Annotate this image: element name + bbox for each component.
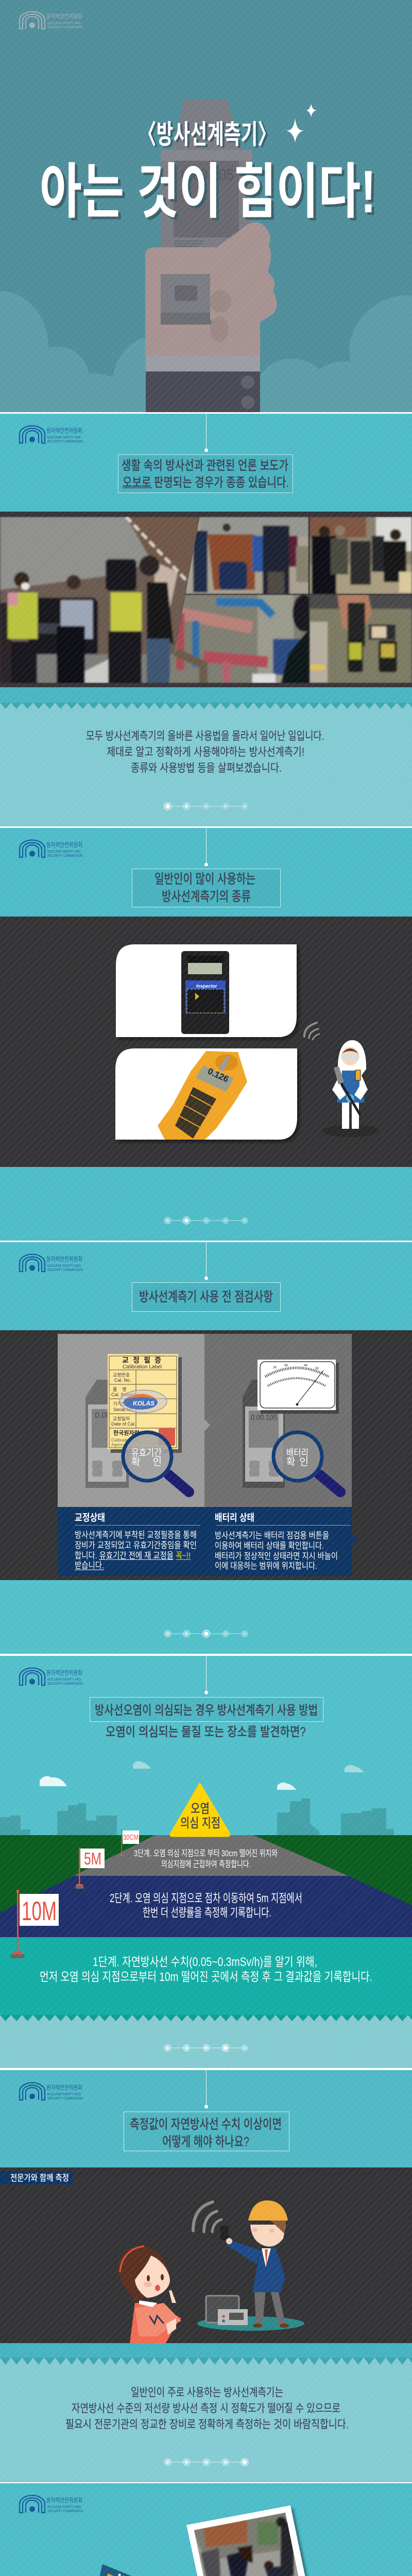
photo: pipe inspection [168,595,315,683]
logo: SECURITY COMMISSION [47,1268,83,1272]
icon: signal arcs [304,1023,319,1040]
heading box: 방사선계측기의 종류 [162,889,251,904]
magnifier: 유효기간 [131,1447,162,1459]
panel: above natural radiation heading [0,2070,412,2167]
panel: news misreport intro [0,414,412,512]
body text: 모두 방사선계측기의 올바른 사용법을 몰라서 일어난 일입니다. [86,730,324,742]
progress dots 5 [164,2459,248,2466]
road step 3: 3단계. 오염 의심 지점으로 부터 30cm 떨어진 위치와 [134,1849,278,1858]
logo: SECURITY COMMISSION [47,2510,83,2513]
photo: polaroid field survey [186,2505,315,2576]
heading box [118,454,293,493]
logo: NUCLEAR SAFETY AND [47,436,81,439]
marker: suspected point [170,1784,230,1836]
flag: 10m [10,1890,59,1958]
logo: 원자력안전위원회 [46,841,82,849]
card: inspector meter: Inspector [196,984,217,989]
road step 3: 의심지점에 근접하여 측정합니다. [161,1859,251,1869]
calibration label: Date of Cal. [111,1421,136,1427]
photo: tunnel inspection [0,517,200,683]
panel: photo collage [0,512,412,687]
connector line [204,1656,208,1694]
logo: NUCLEAR SAFETY AND [47,2093,81,2096]
progress dots 2 [164,1217,248,1224]
label: 전문가와 함께 측정 [10,2173,69,2183]
heading box [132,869,280,907]
flag: 5m: 5M [84,1849,101,1868]
divider [0,1241,412,1242]
calibration label: Agency for [111,1443,131,1447]
body text [65,2386,349,2431]
logo [20,1254,83,1272]
panel: measure with an expert [0,2167,412,2343]
navy caption: 합니다. 유효기간 전에 재 교정을 [75,1551,174,1561]
calibration label: 한국원자력 [113,1429,140,1436]
heading box: 어떻게 해야 하나요? [162,2134,249,2149]
meter silhouette: 0.00 [95,1411,111,1420]
step text [40,1955,372,1984]
logo: NUCLEAR SAFETY AND [47,1264,81,1268]
road step 2: 한번 더 선량률을 측정해 기록합니다. [143,1906,271,1919]
logo: NUCLEAR SAFETY AND [47,850,81,854]
calibration label: Calibration Lab [111,1438,139,1443]
magnifier [273,1432,340,1492]
subheading: 오염이 의심되는 물질 또는 장소를 발견하면? [106,1725,306,1739]
navy caption: 방사선계측기에 부착된 교정필증을 통해 [75,1530,197,1540]
meter [161,99,252,330]
title: subtitle: 〈방사선계측기〉 [138,120,276,150]
heading box: 생활 속의 방사선과 관련된 언론 보도가 [122,459,288,473]
card: orange geiger counter [115,1048,297,1140]
calibration label: Cal. No. [114,1378,131,1383]
phone [78,2565,152,2576]
photo: lecture hall group [310,517,412,594]
divider [0,2068,412,2070]
navy caption: 배터리가 정상적인 상태라면 지시 바늘이 [215,1551,338,1561]
logo: 원자력안전위원회 [46,1256,82,1263]
logo: SECURITY COMMISSION [47,2097,83,2100]
card: orange geiger counter: 0.126 [206,1066,230,1084]
navy caption [58,1507,204,1576]
hand palm [145,247,216,356]
panel: progress band 2 [0,1167,412,1241]
meter: 0.00.105 [181,166,234,183]
body text: 일반인이 주로 사용하는 방사선계측기는 [131,2386,283,2399]
marker: suspected point: 오염 [191,1802,210,1816]
logo [20,840,83,858]
magnifier: 배터리 [286,1447,308,1459]
logo: 원자력안전위원회 [46,427,82,434]
navy caption: 교정상태 [75,1512,105,1523]
character: worker in protective suit [322,1040,379,1137]
panel: step 1 [0,1937,412,2068]
navy caption: 이용하여 배터리 상태를 확인합니다. [215,1541,324,1551]
photo: meters on granite [310,595,412,683]
logo [20,426,83,444]
logo: NUCLEAR SAFETY AND [47,2505,81,2509]
calibration label: Cal. Subject [111,1392,136,1397]
divider [0,826,412,828]
heading box: 일반인이 많이 사용하는 [154,871,255,887]
calibration label: 기기번호 [113,1401,130,1406]
panel: intro text [0,687,412,826]
right cloud [260,295,412,412]
body text: 필요시 전문기관의 정교한 장비로 정확하게 측정하는 것이 바람직합니다. [65,2418,349,2431]
battery gauge [258,1360,339,1414]
logo: SECURITY COMMISSION [47,440,83,444]
connector line [204,1242,208,1280]
heading box: 측정값이 자연방사선 수치 이상이면 [130,2116,282,2132]
magnifier: 확 인 [286,1456,308,1468]
panel: pre-use check heading [0,1242,412,1330]
navy caption: 이에 대응하는 범위에 위치합니다. [215,1561,317,1571]
road step 2 [0,1876,412,1937]
calibration label: Serial No. [113,1407,134,1412]
flag: 30cm [120,1829,139,1856]
flag: 10m: 10M [22,1896,57,1926]
flag: 5m [75,1848,105,1889]
heading box [90,1697,323,1722]
heading box [132,1283,280,1312]
panel: meter types [0,917,412,1167]
hand fingers [210,222,277,356]
navy caption: 받습니다. [75,1561,104,1570]
logo: SECURITY COMMISSION [47,854,83,858]
logo: 원자력안전위원회 [46,2084,82,2091]
pole base overlay [10,1937,25,1958]
photo: workshop survey [185,517,309,594]
marker: suspected point: 의심 지점 [180,1816,220,1831]
heading box: 방사선계측기 사용 전 점검사항 [139,1289,273,1304]
panel: pre-use check [0,1330,412,1580]
logo: hero: 원자력안전위원회 [46,13,82,20]
illustration: hand holding radiation meter [145,99,277,412]
calibration label: 교정번호 [113,1372,130,1378]
panel: hero background [0,0,412,412]
logo: hero [20,11,83,29]
city skyline [0,1799,394,1835]
logo: hero: NUCLEAR SAFETY AND [47,22,81,25]
icon: sparkles [285,104,317,143]
calibration label: 품 명 [113,1387,127,1392]
meter silhouette [243,1380,285,1488]
calibration label: 교 정 필 증 [122,1356,161,1364]
divider [0,412,412,414]
zigzag edge [0,2015,412,2021]
body text [86,730,324,774]
flag: 30cm: 30CM [123,1833,139,1842]
logo [20,2082,83,2100]
logo: 원자력안전위원회 [46,1669,82,1676]
panel: accuracy note [0,2343,412,2482]
calibration label: KOLAS [133,1400,154,1407]
logo [20,2496,83,2513]
clouds [40,1761,364,1790]
divider [0,1654,412,1656]
navy caption: 배터리 상태 [215,1512,254,1523]
navy caption [204,1507,358,1576]
progress dots 3 [164,1630,248,1637]
panel: meter types heading [0,828,412,917]
zigzag edge [0,703,412,709]
panel: report hotline [0,2483,412,2576]
card: calibration status [58,1334,204,1576]
progress dots 1 [164,803,248,810]
meter silhouette: 0.00.105 [251,1413,277,1422]
meter silhouette [85,1380,129,1488]
body text: 종류와 사용방법 등을 살펴보겠습니다. [131,761,282,774]
navy caption: 꼭~!! [176,1551,191,1561]
sleeve [146,371,260,412]
battery gauge: 3K [284,1364,288,1367]
navy caption: 방사선계측기는 배터리 점검용 버튼을 [215,1531,329,1540]
heading box: 방사선오염이 의심되는 경우 방사선계측기 사용 방법 [95,1703,318,1718]
divider [0,2482,412,2483]
logo [20,1668,83,1686]
magnifier [123,1432,189,1492]
connector line [204,414,208,452]
icon: signal arcs [193,2202,221,2232]
label [0,2171,73,2184]
body text: 제대로 알고 정확하게 사용해야하는 방사선계측기! [107,745,304,758]
illustration: road with distance steps [0,1784,412,1958]
illustration: hand holding phone [3,2565,152,2576]
left cloud [0,291,146,412]
navy caption: 장비가 교정되었고 유효기간중임을 확인 [75,1540,197,1550]
road step 2: 2단계. 오염 의심 지점으로 점차 이동하여 5m 지점에서 [110,1891,302,1905]
equipment cases [206,2296,248,2325]
calibration label: Calibration Label [123,1364,162,1370]
calibration label: 교정일자 [113,1416,130,1421]
road step 3 [74,1835,348,1876]
calibration label [108,1354,182,1453]
logo: SECURITY COMMISSION [47,1682,83,1686]
battery gauge: 2K [273,1366,277,1369]
connector line [204,828,208,867]
body text: 자연방사선 수준의 저선량 방사선 측정 시 정확도가 떨어질 수 있으므로 [72,2402,340,2415]
character: woman [118,2246,181,2343]
panel: how to use on suspected contamination [0,1656,412,1835]
battery gauge: 4K [304,1364,307,1367]
logo: hero: SECURITY COMMISSION [47,26,83,29]
battery gauge: 5K [315,1367,319,1370]
heading box: 오보로 판명되는 경우가 종종 있습니다. [123,476,289,490]
magnifier: 확 인 [131,1456,162,1468]
character: expert [197,2200,304,2331]
cuff [146,356,260,371]
heading box [124,2112,289,2151]
logo: NUCLEAR SAFETY AND [47,1678,81,1682]
step text: 1단계. 자연방사선 수치(0.05~0.3mSv/h)를 알기 위해, [93,1955,317,1969]
zigzag edge [0,2358,412,2365]
progress dots 4 [164,2044,248,2052]
connector line [204,2070,208,2108]
card: battery status [204,1334,358,1576]
panel: progress band 3 [0,1580,412,1654]
card: inspector meter [116,944,297,1037]
logo: 원자력안전위원회 [46,2497,82,2504]
